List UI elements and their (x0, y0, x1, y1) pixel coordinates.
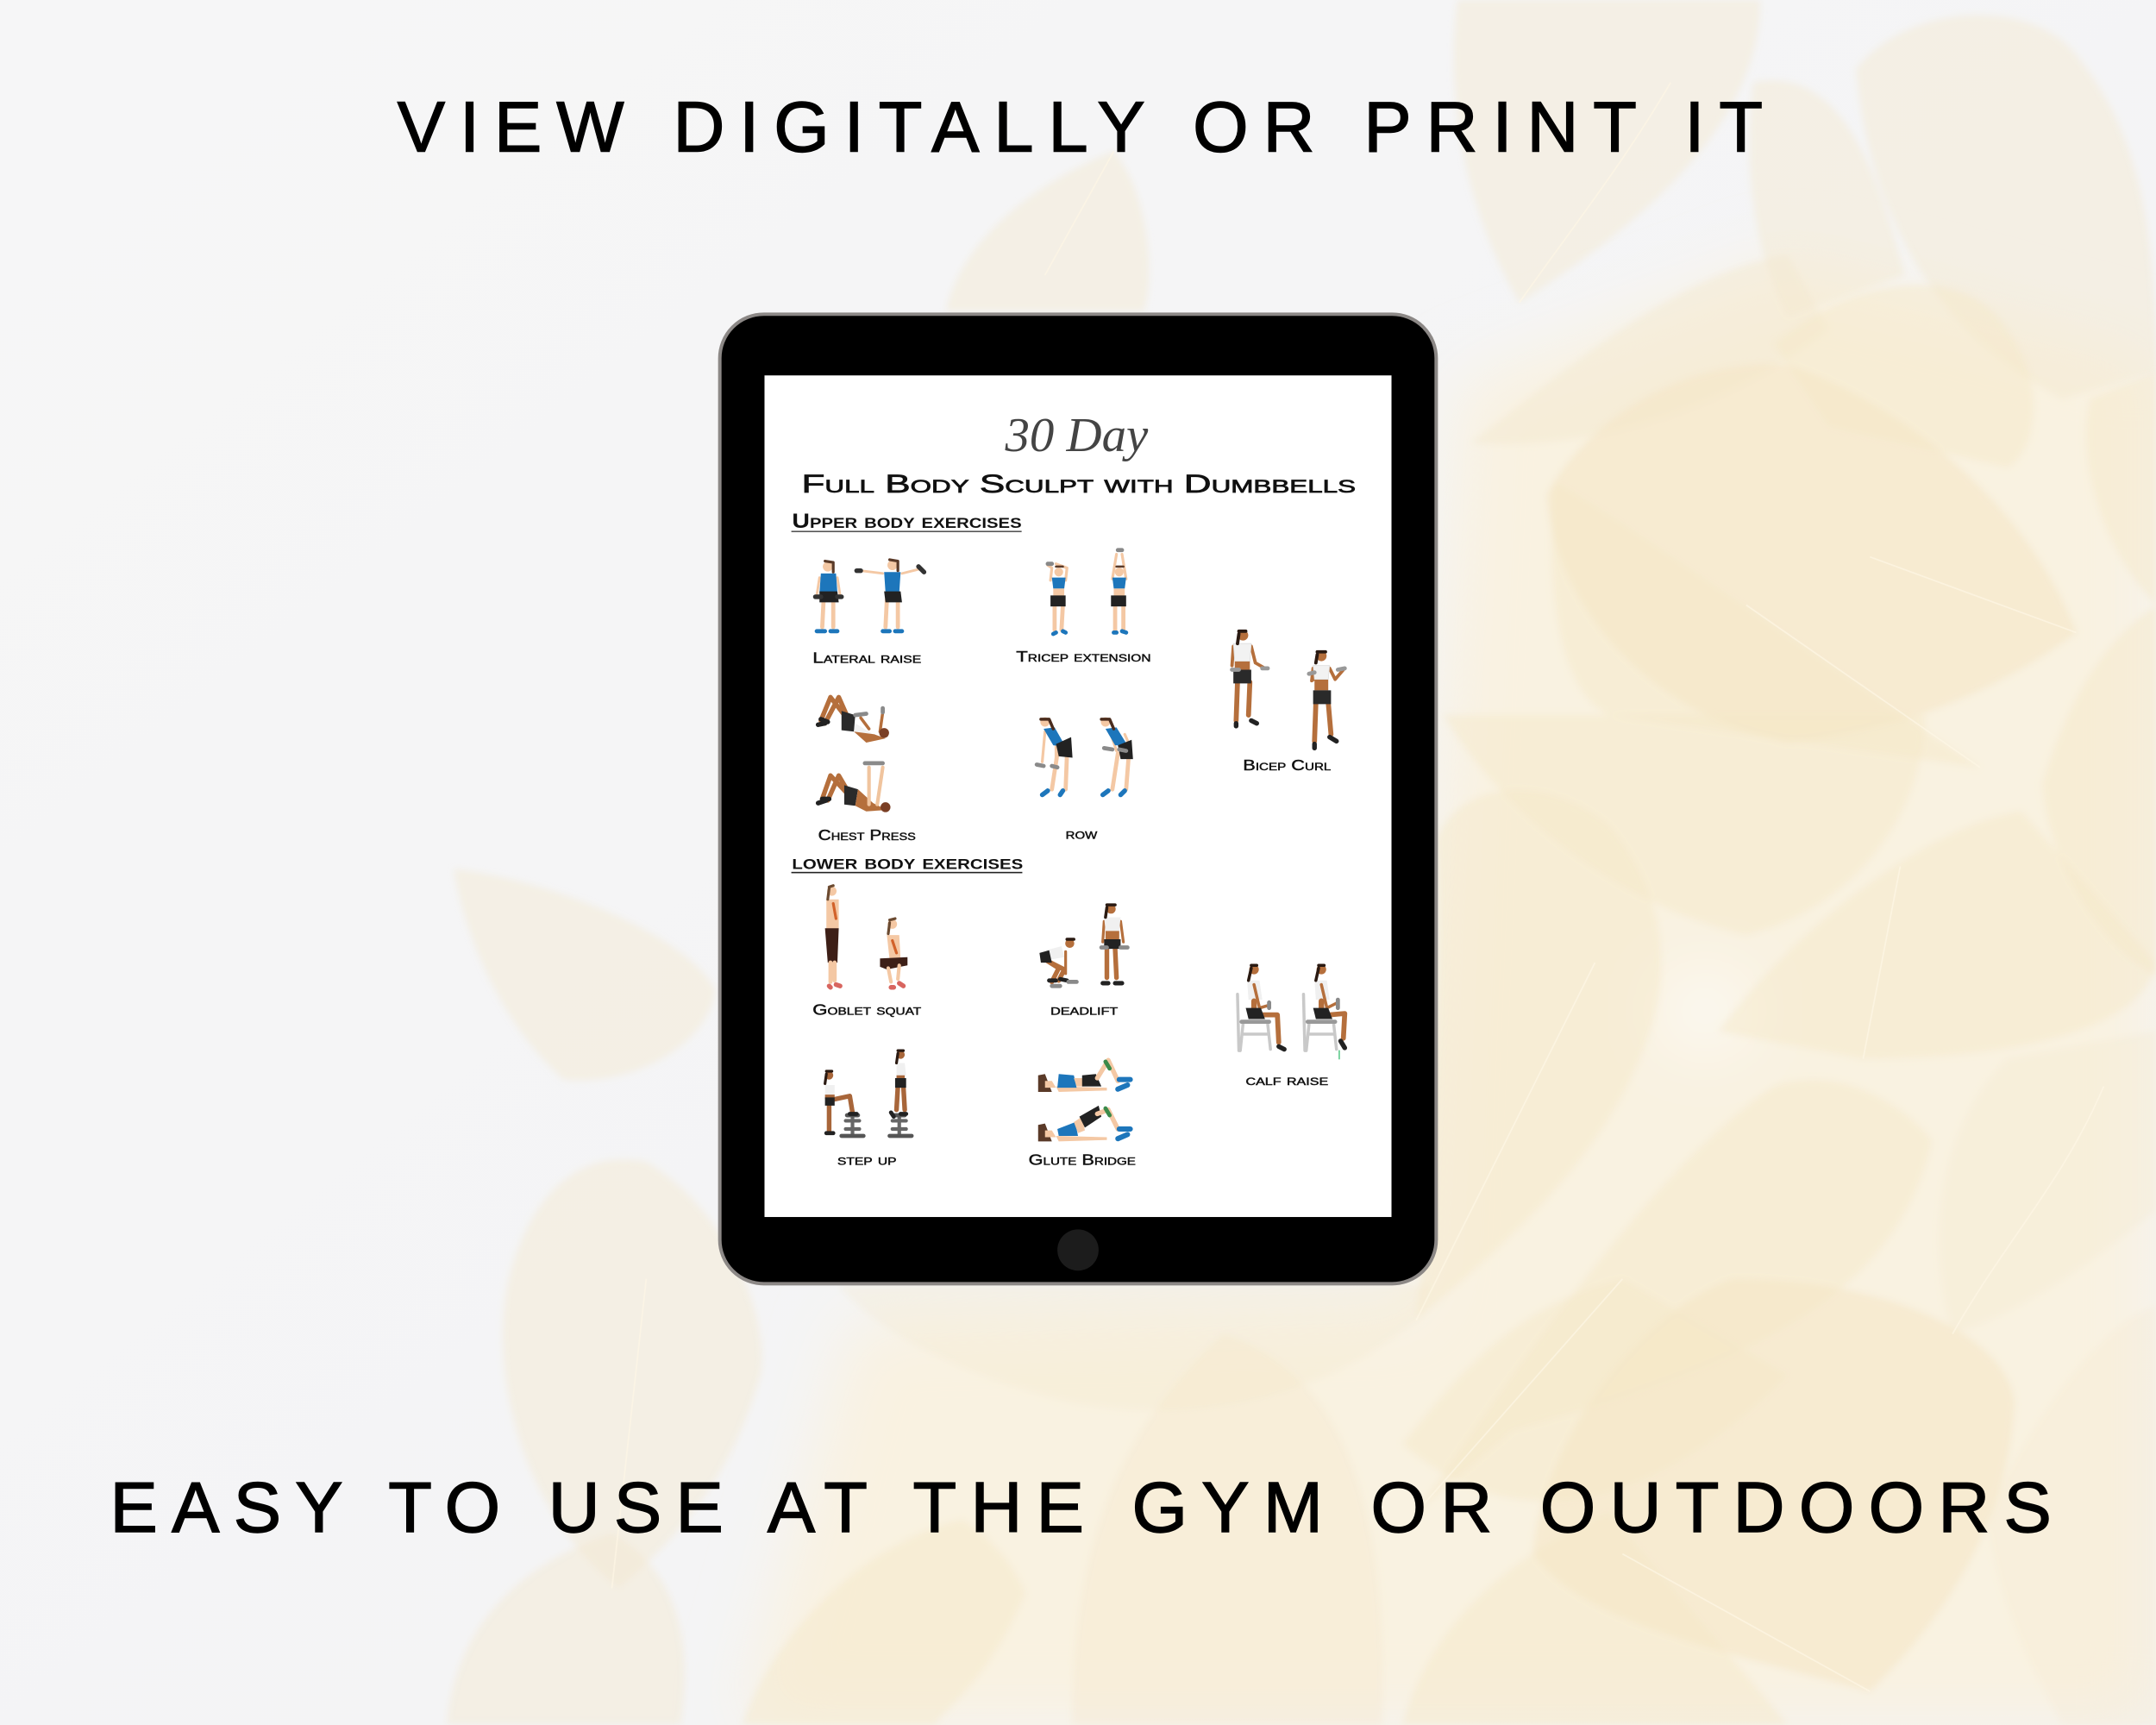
script title: 30 Day: 30 Day (1004, 409, 1149, 462)
section heading: lower body: lower body exercises (792, 851, 1023, 875)
printable title: Full Body Sculpt with Dumbbells (802, 470, 1356, 499)
label: lateral raise: Lateral raise (812, 649, 921, 666)
label: chest press: Chest Press (818, 826, 916, 844)
figure: tricep extension (1048, 550, 1126, 634)
heading: easy to use at the gym or outdoors: EASY TO USE AT THE GYM OR OUTDOORS (110, 1467, 2052, 1547)
section heading: upper body: Upper body exercises (792, 510, 1022, 533)
figure: row (1037, 718, 1133, 795)
tablet device (720, 314, 1436, 1283)
figure: lateral raise (815, 560, 924, 631)
tablet screen (764, 375, 1392, 1217)
label: bicep curl: Bicep Curl (1243, 756, 1332, 774)
label: goblet squat: Goblet squat (812, 1001, 922, 1019)
figure: bicep curl (1232, 630, 1344, 748)
label: deadlift: deadlift (1050, 1001, 1119, 1019)
tablet body (720, 314, 1436, 1283)
figure: chest press (818, 697, 891, 812)
figure: glute bridge (1038, 1060, 1131, 1141)
figure: deadlift (1039, 904, 1127, 986)
label: glute bridge: Glute Bridge (1029, 1151, 1136, 1168)
cream feathers backdrop (447, 0, 2156, 1724)
label: calf raise: calf raise (1246, 1071, 1328, 1088)
figure: calf raise (1238, 964, 1344, 1059)
label: row: row (1066, 825, 1098, 843)
heading: view digitally or print it: VIEW DIGITALLY OR PRINT IT (398, 86, 1763, 166)
label: tricep extension: Tricep extension (1016, 648, 1151, 665)
label: step up: step up (837, 1151, 897, 1168)
figure: step up (825, 1051, 912, 1136)
home button (1057, 1229, 1099, 1270)
figure: goblet squat (825, 886, 907, 988)
